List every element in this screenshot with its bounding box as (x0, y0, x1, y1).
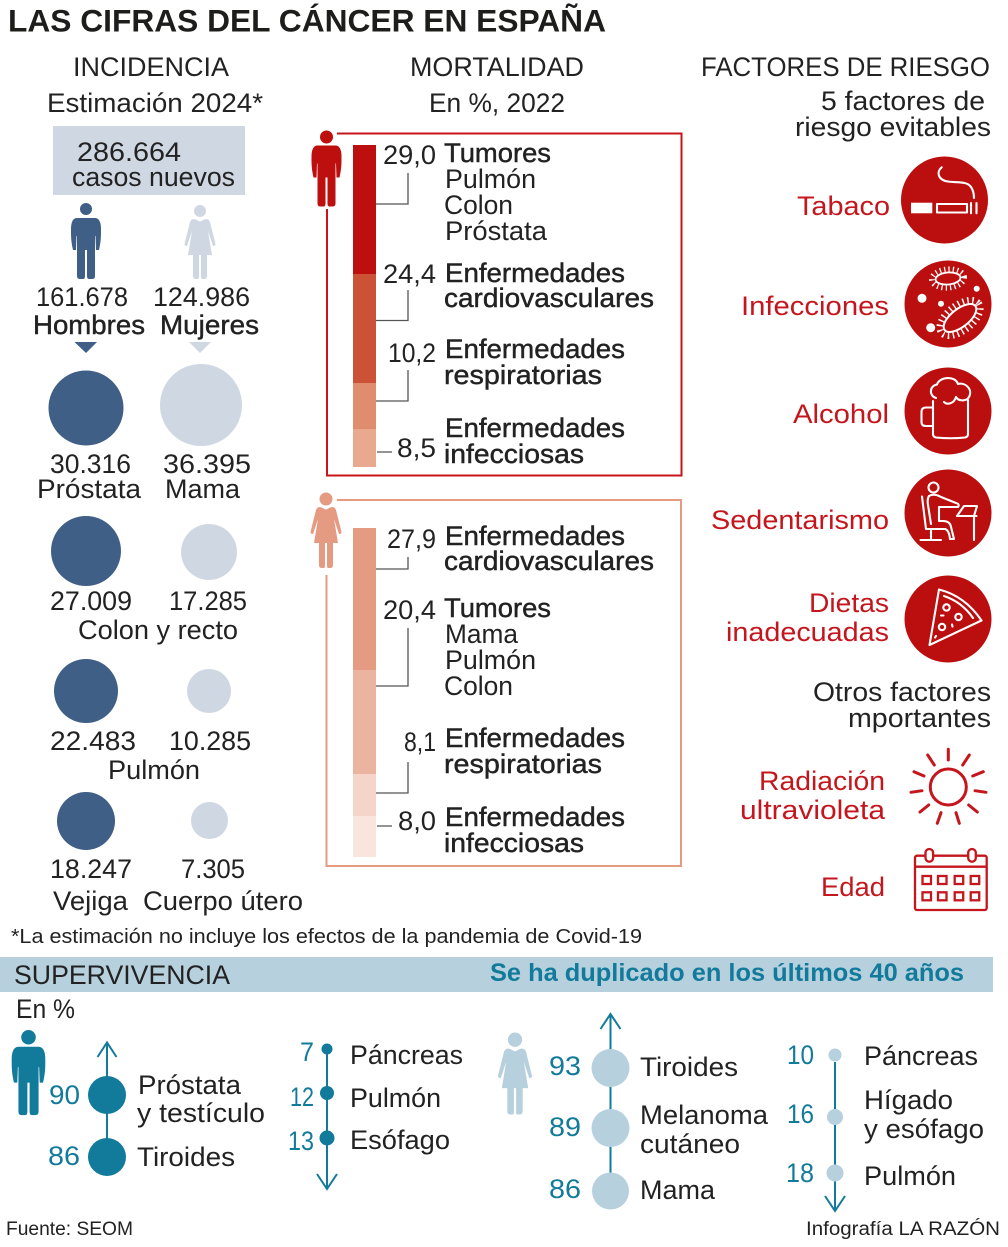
chart: men lowest survival: Esófago (350, 1125, 450, 1155)
men total (33, 282, 145, 353)
header band: Se ha duplicado en los últimos 40 años (490, 959, 964, 987)
icon: man red (312, 130, 342, 206)
values: women: 8,1 (404, 727, 436, 757)
subheading: estimación: Estimación 2024* (47, 88, 264, 118)
bubble row: colon y recto: 27.009 (50, 586, 132, 616)
footnote: *La estimación no incluye los efectos de la pandemia de Covid-19 (11, 926, 642, 948)
factor: dietas inadecuadas: Dietas (809, 588, 889, 618)
labels: women causes: respiratorias (444, 749, 602, 779)
chart: women highest survival: 93 (549, 1051, 581, 1081)
chart: women highest survival: 86 (549, 1174, 581, 1204)
bubble row: próstata and mama: 36.395 (163, 449, 251, 479)
heading: mortalidad: MORTALIDAD (410, 52, 584, 82)
bubble row: vejiga and cuerpo útero: Cuerpo útero (143, 886, 303, 916)
chart: men lowest survival: Pulmón (350, 1083, 441, 1113)
subheading: evitables: riesgo evitables (795, 112, 991, 142)
chart: women highest survival (549, 1014, 769, 1210)
factor: edad (821, 849, 987, 910)
factor: sedentarismo: Sedentarismo (711, 505, 889, 535)
bubble row: pulmón (50, 659, 251, 785)
icon: woman (184, 205, 216, 279)
bubble row: próstata and mama (37, 364, 251, 504)
labels: men causes: Enfermedades (445, 334, 625, 364)
values: women: 8,0 (398, 806, 436, 836)
factor: tabaco (797, 156, 988, 244)
total cases box: 286.664 (77, 137, 181, 167)
women total: 124.986 (153, 282, 250, 312)
chart: men lowest survival: Páncreas (350, 1040, 463, 1070)
labels: women causes: infecciosas (444, 828, 584, 858)
chart: men lowest survival (288, 1037, 463, 1189)
total cases box (53, 126, 245, 195)
bubble row: próstata and mama: Próstata (37, 474, 142, 504)
bubble row: vejiga and cuerpo útero: 7.305 (181, 854, 245, 884)
bubble row: vejiga and cuerpo útero: 18.247 (50, 854, 132, 884)
women total (153, 282, 259, 353)
stacked bar: men (353, 145, 376, 467)
subheading: otros factores: Otros factores (813, 677, 991, 707)
values: men: 10,2 (388, 338, 436, 368)
panel: factores de riesgo (701, 52, 992, 910)
chart: men highest survival (48, 1042, 265, 1176)
factor: alcohol (793, 368, 992, 454)
values: men (383, 140, 436, 463)
chart: women highest survival: 89 (549, 1112, 581, 1142)
factor: radiación ultravioleta: ultravioleta (740, 795, 886, 825)
labels: women causes: Enfermedades (445, 723, 625, 753)
bubble row: vejiga and cuerpo útero: Vejiga (53, 886, 129, 916)
labels: men causes: Enfermedades (445, 413, 625, 443)
factor: radiación ultravioleta: Radiación (759, 766, 885, 796)
chart: women highest survival: cutáneo (640, 1129, 740, 1159)
panel: men mortality (312, 130, 682, 476)
factor: alcohol: Alcohol (793, 399, 889, 429)
panel: incidencia (33, 52, 303, 916)
bubble row: próstata and mama: 30.316 (50, 449, 131, 479)
chart: women lowest survival: Hígado (864, 1085, 953, 1115)
labels: men causes: respiratorias (444, 360, 602, 390)
labels: women causes: Enfermedades (445, 802, 625, 832)
labels: men causes (444, 138, 654, 469)
factor: tabaco: Tabaco (797, 191, 890, 221)
panel: mortalidad (310, 52, 682, 866)
subheading: otros factores (813, 677, 991, 733)
labels: women causes (444, 521, 654, 858)
subheading: evitables (795, 86, 991, 142)
chart: men lowest survival: 7 (300, 1037, 314, 1067)
women total: Mujeres (160, 310, 259, 340)
labels: women causes: Colon (444, 671, 513, 701)
labels: women causes: cardiovasculares (444, 546, 654, 576)
subheading: en porcentaje: En %, 2022 (429, 88, 565, 118)
icon: woman light blue (498, 1033, 532, 1114)
values: men: 8,5 (397, 433, 436, 463)
chart: women highest survival: Mama (640, 1175, 716, 1205)
subheading: en porcentaje: En % (16, 994, 75, 1024)
bubble row: colon y recto: 17.285 (169, 586, 247, 616)
labels: women causes: Enfermedades (445, 521, 625, 551)
labels: men causes: Pulmón (445, 164, 536, 194)
bubble row: próstata and mama: Mama (165, 474, 241, 504)
chart: men highest survival: 90 (49, 1080, 80, 1110)
icon: man teal (12, 1030, 45, 1115)
heading: incidencia: INCIDENCIA (73, 52, 229, 82)
bubble row: pulmón: 10.285 (169, 726, 251, 756)
labels: men causes: infecciosas (444, 439, 584, 469)
chart: women lowest survival: 18 (786, 1158, 814, 1188)
labels: women causes: Pulmón (445, 645, 536, 675)
values: men: 24,4 (383, 259, 436, 289)
total cases box: casos nuevos (72, 162, 235, 192)
values: women: 27,9 (387, 524, 436, 554)
labels: men causes: Próstata (445, 216, 548, 246)
icon: man (71, 203, 101, 279)
factor: sedentarismo (711, 470, 992, 556)
bubble row: colon y recto (50, 516, 247, 645)
bubble row: pulmón: Pulmón (108, 755, 200, 785)
factor: infecciones: Infecciones (741, 291, 889, 321)
chart: men highest survival: Próstata (138, 1070, 242, 1100)
chart: women lowest survival: y esófago (864, 1114, 984, 1144)
panel: women mortality (310, 492, 681, 866)
chart: women lowest survival: 10 (787, 1040, 814, 1070)
heading: factores de riesgo: FACTORES DE RIESGO (701, 52, 990, 82)
labels: men causes: cardiovasculares (444, 283, 654, 313)
values: women (383, 524, 436, 836)
factor: dietas inadecuadas: inadecuadas (726, 617, 889, 647)
source credit: Fuente: SEOM (6, 1219, 133, 1240)
chart: men lowest survival: 12 (290, 1082, 314, 1112)
chart: men highest survival: Tiroides (137, 1142, 235, 1172)
chart: women lowest survival: Páncreas (864, 1041, 978, 1071)
chart: women lowest survival (786, 1040, 984, 1211)
chart: men lowest survival: 13 (288, 1126, 314, 1156)
values: men: 29,0 (383, 140, 436, 170)
bubble row: pulmón: 22.483 (50, 726, 136, 756)
labels: men causes: Enfermedades (445, 258, 625, 288)
chart: men highest survival: 86 (48, 1141, 80, 1171)
header band (0, 957, 993, 992)
panel: supervivencia (0, 957, 993, 1211)
factor: dietas inadecuadas (726, 576, 992, 662)
bubble row: vejiga and cuerpo útero (50, 792, 303, 916)
men total: 161.678 (36, 282, 128, 312)
subheading: evitables: 5 factores de (821, 86, 985, 116)
factor: infecciones (741, 260, 992, 348)
bubble row: colon y recto: Colon y recto (78, 615, 238, 645)
header band: SUPERVIVENCIA (14, 960, 230, 990)
labels: men causes: Colon (444, 190, 513, 220)
factor: radiación ultravioleta (740, 749, 986, 825)
chart: women highest survival: Tiroides (640, 1052, 738, 1082)
stacked bar: women (353, 528, 376, 857)
chart: women lowest survival: 16 (787, 1099, 814, 1129)
subheading: otros factores: mportantes (848, 703, 991, 733)
labels: women causes: Mama (445, 619, 519, 649)
chart: women lowest survival: Pulmón (864, 1161, 956, 1191)
icon: woman salmon (310, 492, 342, 568)
labels: women causes: Tumores (444, 593, 551, 623)
men total: Hombres (33, 310, 145, 340)
factor: edad: Edad (821, 872, 885, 902)
chart: women highest survival: Melanoma (640, 1100, 769, 1130)
author credit: Infografía LA RAZÓN (806, 1218, 1000, 1240)
values: women: 20,4 (383, 595, 436, 625)
chart: men highest survival: y testículo (137, 1098, 265, 1128)
labels: men causes: Tumores (444, 138, 551, 168)
title: LAS CIFRAS DEL CÁNCER EN ESPAÑA (8, 2, 606, 38)
